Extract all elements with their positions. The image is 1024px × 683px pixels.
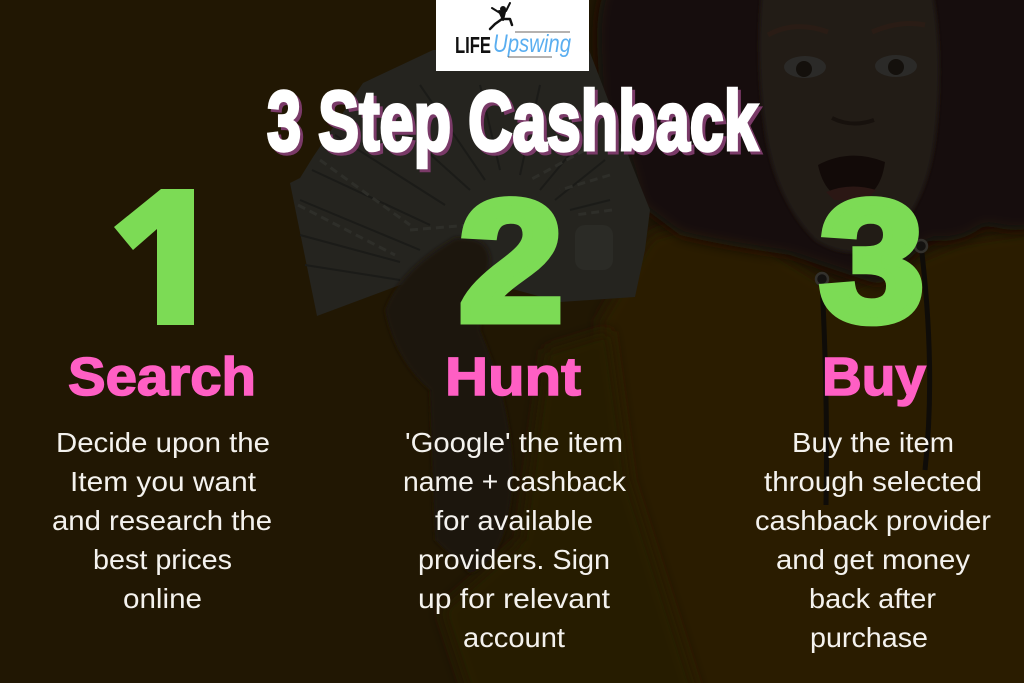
hair bbox=[597, 0, 1024, 285]
description bbox=[755, 427, 991, 653]
face bbox=[759, 0, 939, 252]
description: up for relevant bbox=[418, 583, 610, 614]
description bbox=[52, 427, 272, 614]
description: providers. Sign bbox=[418, 544, 610, 575]
description: purchase bbox=[810, 622, 928, 653]
mouth bbox=[818, 156, 885, 200]
heading: Buy: Buy bbox=[822, 347, 926, 407]
description: account bbox=[463, 622, 565, 653]
heading: Hunt: Hunt bbox=[445, 347, 581, 407]
title: 3 Step Cashback bbox=[267, 74, 758, 168]
logo panel bbox=[436, 0, 589, 71]
description: through selected bbox=[764, 466, 982, 497]
title: 3 Step Cashback bbox=[270, 77, 761, 171]
number 2: 2 bbox=[459, 166, 563, 357]
step 2 column bbox=[403, 166, 627, 653]
description: best prices bbox=[93, 544, 232, 575]
cash fan bbox=[290, 50, 650, 316]
description: Decide upon the bbox=[56, 427, 270, 458]
description: back after bbox=[809, 583, 936, 614]
logo wordmark: LIFE bbox=[455, 32, 491, 58]
hand and arm bbox=[385, 238, 513, 573]
description: Item you want bbox=[70, 466, 256, 497]
description: for available bbox=[435, 505, 593, 536]
number 1: 1 bbox=[122, 156, 226, 362]
description bbox=[403, 427, 627, 653]
sleeve bbox=[440, 330, 700, 683]
step 1 column bbox=[52, 156, 272, 614]
drawstrings bbox=[822, 245, 930, 505]
description: online bbox=[123, 583, 202, 614]
description: 'Google' the item bbox=[405, 427, 623, 458]
step 3 column bbox=[755, 166, 991, 653]
description: cashback provider bbox=[755, 505, 991, 536]
hoodie bbox=[600, 215, 1024, 683]
description: name + cashback bbox=[403, 466, 627, 497]
description: and research the bbox=[52, 505, 272, 536]
logo panel: Upswing bbox=[493, 30, 571, 58]
description: Buy the item bbox=[792, 427, 954, 458]
nose bbox=[832, 118, 874, 124]
icon: jumping figure bbox=[490, 3, 512, 29]
eyes bbox=[784, 55, 917, 78]
heading: Search: Search bbox=[68, 347, 256, 407]
eyebrows bbox=[768, 24, 925, 35]
number 3: 3 bbox=[820, 166, 924, 357]
description: and get money bbox=[776, 544, 970, 575]
